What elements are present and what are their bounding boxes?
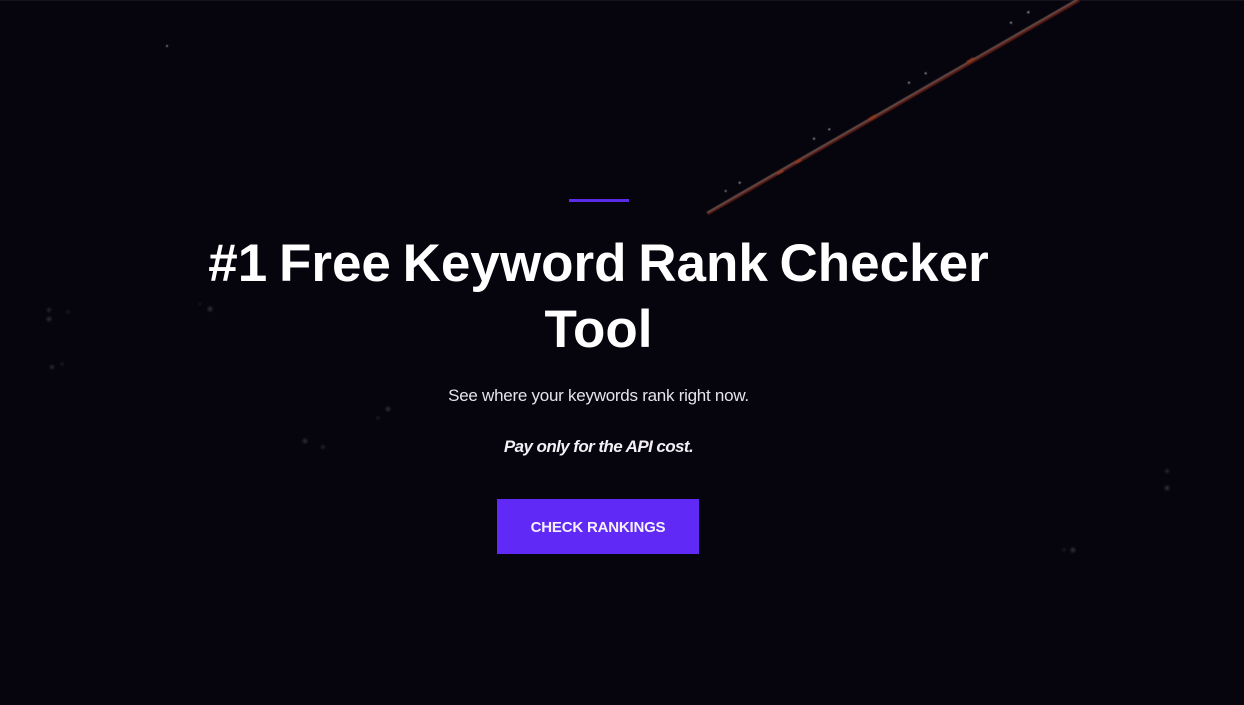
pricing note: Pay only for the API cost. xyxy=(504,437,693,456)
title xyxy=(208,234,989,359)
subtitle: See where your keywords rank right now. xyxy=(448,386,749,405)
title: #1 Free Keyword Rank Checker xyxy=(208,234,989,293)
button: check rankings xyxy=(497,499,699,554)
title: Tool xyxy=(545,300,652,359)
accent line xyxy=(569,198,629,202)
button label: CHECK RANKINGS xyxy=(531,519,665,536)
